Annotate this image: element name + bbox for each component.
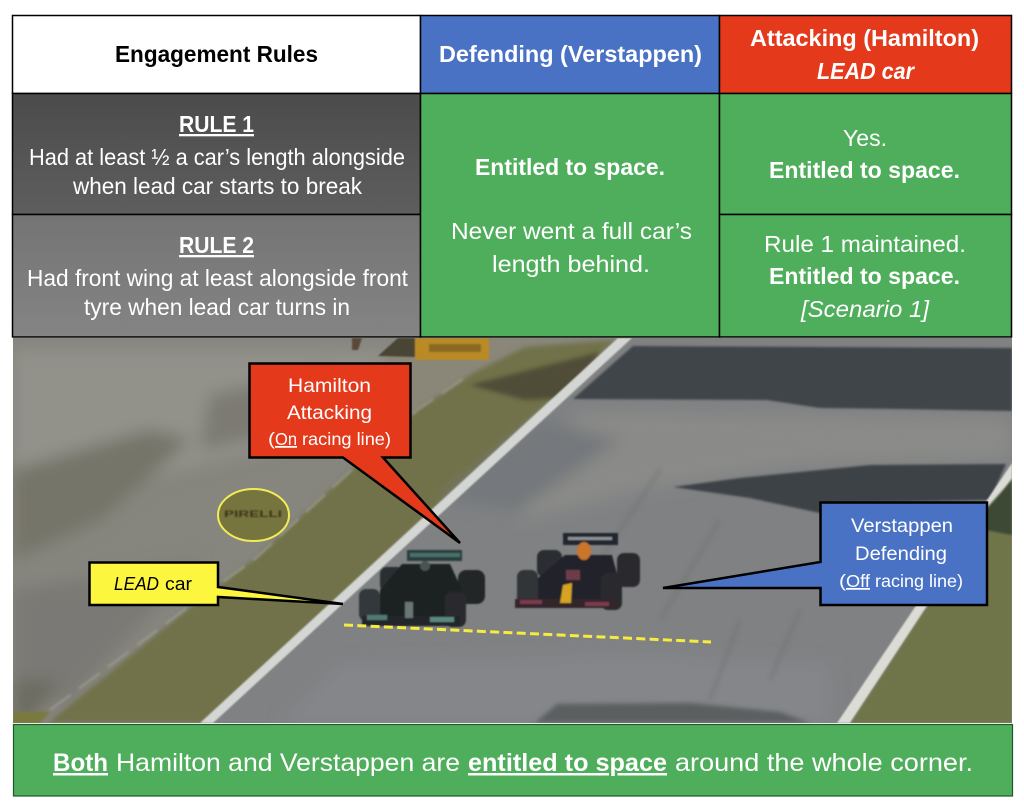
gravel edge stripes (50, 374, 470, 710)
callout: Hamilton attacking: racing line) (302, 429, 391, 449)
attacking verdict rule 2: [Scenario 1] (800, 296, 930, 322)
heading: defending: Defending (Verstappen) (439, 41, 702, 67)
callout: Verstappen defending: Defending (855, 543, 947, 565)
defending verdict: Entitled to space. (475, 154, 665, 180)
heading: engagement rules: Engagement Rules (115, 41, 318, 67)
far trackside board (352, 338, 489, 360)
grass strip (48, 340, 615, 723)
right grass verge (851, 490, 1012, 723)
panel: engagement rules table (12, 16, 1012, 337)
highlighted pirelli logo (218, 489, 289, 541)
rule 2: RULE 2 (179, 232, 254, 258)
heading: defending (420, 16, 720, 94)
callout: Verstappen defending: Off (846, 571, 870, 591)
callout: Hamilton attacking: Hamilton (288, 375, 371, 397)
callout: Hamilton attacking: On (275, 429, 297, 449)
conclusion banner: around the whole corner. (675, 749, 973, 777)
rule 1: Had at least ½ a car’s length alongside (29, 144, 405, 170)
rule 2: tyre when lead car turns in (84, 294, 350, 320)
attacking verdict rule 1: Entitled to space. (769, 157, 960, 183)
track surface (564, 383, 584, 402)
callout: Hamilton attacking: ( (268, 429, 275, 449)
attacking verdict rule 1 (720, 94, 1012, 214)
callout: Verstappen defending: racing line) (875, 571, 963, 591)
top brown verge (388, 358, 394, 362)
attacking verdict rule 2 (720, 214, 1012, 337)
callout: lead car: car (165, 573, 192, 594)
conclusion banner: entitled to space (468, 749, 667, 777)
shadows on track (573, 346, 1012, 411)
heading: engagement rules (12, 16, 420, 94)
attacking verdict rule 2: Rule 1 maintained. (764, 231, 966, 257)
highlighted pirelli logo: PIRELLI (224, 509, 282, 519)
callout: Verstappen defending (663, 502, 987, 605)
conclusion banner (14, 724, 1012, 796)
rule 1: when lead car starts to break (72, 173, 362, 199)
conclusion banner: Both (53, 749, 108, 777)
callout: Hamilton attacking: Attacking (287, 402, 372, 424)
rule 2: Had front wing at least alongside front (27, 265, 409, 291)
attacking verdict rule 2: Entitled to space. (769, 263, 960, 289)
icon: red bull car (515, 533, 640, 610)
dashed line: front wing alignment (344, 625, 711, 642)
callout: Verstappen defending: Verstappen (851, 515, 953, 537)
tyre streaks on track (600, 470, 800, 700)
heading: attacking: Attacking (Hamilton) (750, 25, 979, 51)
heading: attacking: LEAD car (817, 58, 915, 84)
callout: Hamilton attacking (250, 364, 460, 543)
callout: lead car: LEAD (114, 573, 159, 594)
callout: lead car (90, 562, 343, 605)
track edge white lines (200, 338, 632, 723)
conclusion banner: Hamilton and Verstappen are (116, 749, 460, 777)
defending verdict: Never went a full car’s (451, 218, 692, 244)
heading: attacking (720, 16, 1012, 94)
rule 2 (12, 214, 420, 337)
defending verdict (420, 94, 720, 337)
defending verdict: length behind. (492, 251, 650, 277)
rule 1 (12, 94, 420, 214)
panel: track photograph (13, 338, 1012, 723)
callout: Verstappen defending: ( (839, 571, 846, 591)
icon: mercedes car (359, 550, 485, 627)
rule 1: RULE 1 (179, 111, 254, 137)
attacking verdict rule 1: Yes. (843, 125, 887, 151)
